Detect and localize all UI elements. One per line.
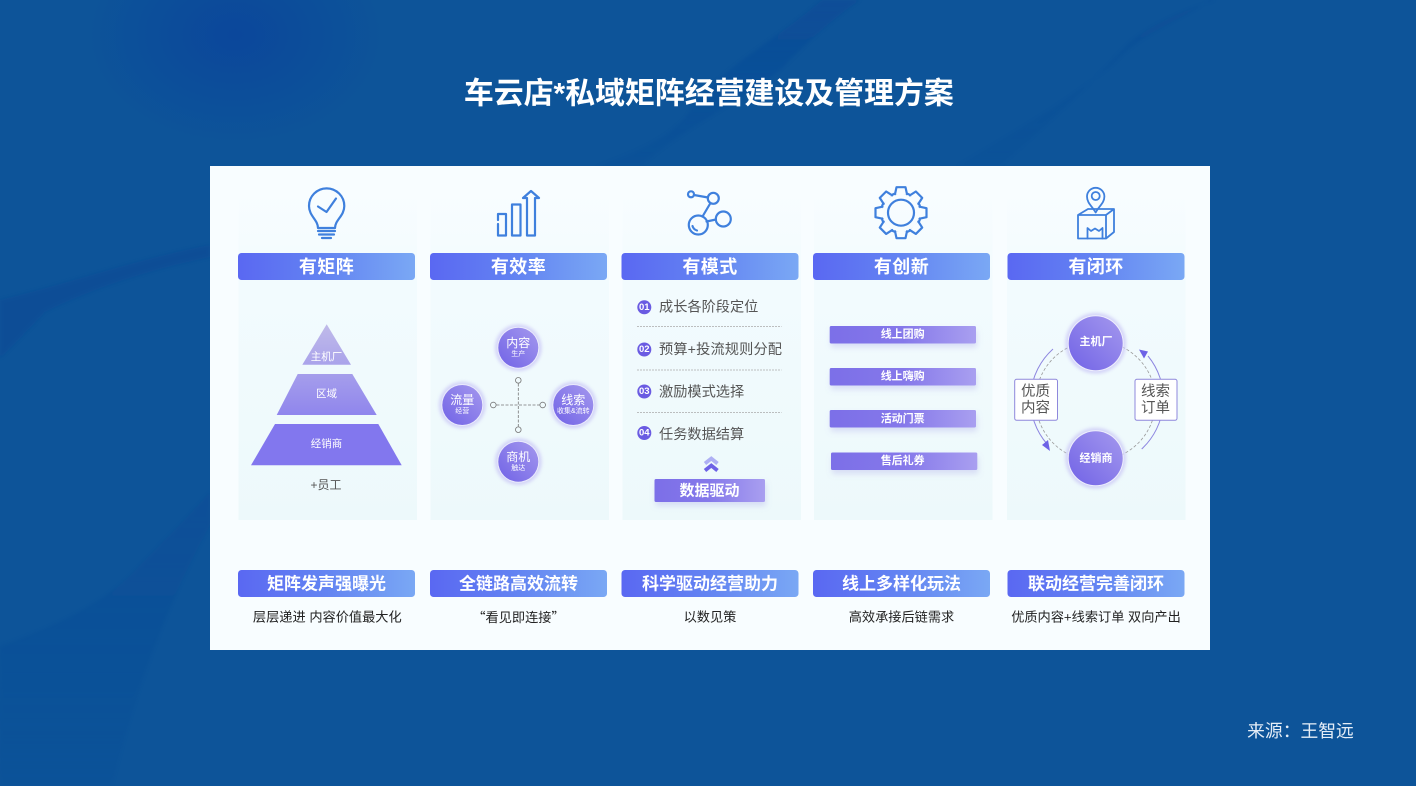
right arrow arc — [1139, 350, 1163, 449]
node: 主机厂: 主机厂 — [1080, 334, 1112, 348]
summary bar: 矩阵发声强曝光: 矩阵发声强曝光 — [267, 574, 386, 594]
box: 优质内容 — [1015, 379, 1058, 420]
button: 线上嗨购: 线上嗨购 — [881, 368, 925, 382]
node: 内容生产 — [495, 324, 542, 371]
node: 商机触达: 触达 — [511, 463, 525, 472]
node: 商机触达 — [495, 438, 542, 485]
node: 内容生产: 内容 — [506, 335, 530, 350]
list item 01: 01 — [639, 302, 650, 313]
node: 线索收集&流转 — [550, 382, 597, 428]
closed loop diagram — [1015, 313, 1177, 489]
header: 有闭环 — [1008, 253, 1184, 280]
box: 线索订单 — [1135, 379, 1177, 420]
list item 04: 04 — [639, 428, 650, 438]
box: 优质内容: 优质 — [1021, 383, 1050, 400]
pyramid tier: 区域 — [277, 374, 377, 415]
pyramid tier: 经销商 — [251, 424, 402, 465]
pyramid tier: 区域: 区域 — [316, 387, 337, 400]
caption: 创新: 高效承接后链需求 — [849, 608, 954, 624]
column background: model — [622, 190, 801, 520]
summary bar: 联动经营完善闭环 — [1008, 570, 1184, 597]
node: 经销商 — [1065, 428, 1126, 489]
button: 活动门票 — [830, 410, 976, 428]
pyramid chart — [251, 324, 402, 492]
caption: 矩阵: 层层递进 内容价值最大化 — [253, 608, 402, 624]
header: 有效率: 有效率 — [491, 257, 546, 277]
node: 流量经营: 经营 — [455, 406, 469, 415]
button: 线上团购 — [830, 326, 976, 344]
column background: closed loop — [1007, 190, 1186, 520]
column background: matrix — [238, 190, 417, 520]
node: 线索收集&流转: 线索 — [561, 393, 585, 407]
summary bar: 线上多样化玩法 — [813, 570, 990, 597]
pyramid tier: 经销商: 经销商 — [311, 437, 342, 450]
header: 有效率 — [430, 253, 607, 280]
pyramid note: +员工: +员工 — [310, 478, 342, 492]
title: 车云店*私域矩阵经营建设及管理方案 — [464, 78, 954, 110]
caption: 闭环: 优质内容+线索订单 双向产出 — [1011, 608, 1181, 624]
caption: 效率: “看见即连接” — [472, 607, 565, 626]
button: 线上团购: 线上团购 — [881, 326, 925, 340]
radial diagram: four nodes — [439, 324, 597, 485]
node: 商机触达: 商机 — [506, 449, 530, 464]
dashed ring — [1036, 341, 1156, 461]
list item 02: 预算+投流规则分配 — [659, 342, 782, 358]
column background: innovation — [814, 190, 992, 520]
pyramid tier: 主机厂: 主机厂 — [311, 350, 342, 363]
node: 流量经营 — [439, 382, 486, 428]
main white panel — [210, 166, 1210, 650]
node: 内容生产: 生产 — [511, 349, 525, 358]
list item 03: 激励模式选择 — [659, 384, 744, 400]
header: 有模式 — [622, 253, 798, 280]
node: 主机厂 — [1065, 313, 1126, 374]
cross connector — [490, 378, 546, 433]
button: 数据驱动 — [654, 479, 765, 502]
list item 03: 03 — [639, 386, 650, 397]
button: 线上嗨购 — [830, 368, 976, 386]
box: 线索订单: 线索 — [1141, 383, 1170, 400]
icon: rising bars with arrow — [498, 191, 539, 236]
summary bar: 全链路高效流转: 全链路高效流转 — [459, 574, 578, 594]
caption: 模式: 以数见策 — [684, 608, 736, 624]
summary bar: 线上多样化玩法: 线上多样化玩法 — [842, 574, 961, 594]
icon: gear — [876, 187, 926, 238]
node: 经销商: 经销商 — [1080, 450, 1112, 464]
summary bar: 全链路高效流转 — [430, 570, 607, 597]
button: 售后礼券 — [831, 452, 977, 470]
box: 优质内容: 内容 — [1021, 400, 1050, 416]
icon: connected nodes — [688, 191, 731, 234]
box: 线索订单: 订单 — [1141, 400, 1170, 416]
numbered list — [637, 300, 782, 502]
summary bar: 矩阵发声强曝光 — [238, 570, 415, 597]
header: 有闭环: 有闭环 — [1068, 257, 1124, 277]
header: 有模式: 有模式 — [682, 257, 738, 277]
icon: light bulb with check — [309, 188, 344, 238]
header: 有创新: 有创新 — [874, 256, 929, 277]
header: 有矩阵 — [238, 253, 415, 280]
left arrow arc — [1030, 349, 1053, 451]
node: 线索收集&流转: 收集&流转 — [557, 406, 590, 415]
button: 活动门票: 活动门票 — [881, 411, 925, 425]
summary bar: 联动经营完善闭环: 联动经营完善闭环 — [1028, 574, 1164, 594]
button: 数据驱动: 数据驱动 — [679, 482, 740, 500]
column background: efficiency — [430, 190, 609, 520]
list item 02: 02 — [639, 344, 650, 355]
icon: double chevron up — [705, 458, 718, 470]
icon: location pin over box — [1078, 188, 1114, 238]
header: 有矩阵: 有矩阵 — [299, 257, 354, 277]
source credit: 来源：王智远 — [1247, 721, 1354, 741]
header: 有创新 — [813, 253, 990, 280]
list item 04: 任务数据结算 — [659, 427, 744, 443]
summary bar: 科学驱动经营助力 — [622, 570, 798, 597]
innovation buttons — [830, 326, 977, 470]
pyramid tier: 主机厂 — [302, 324, 351, 365]
node: 流量经营: 流量 — [450, 393, 474, 407]
list item 01: 成长各阶段定位 — [659, 300, 758, 316]
button: 售后礼券: 售后礼券 — [881, 453, 925, 467]
summary bar: 科学驱动经营助力: 科学驱动经营助力 — [642, 574, 778, 594]
